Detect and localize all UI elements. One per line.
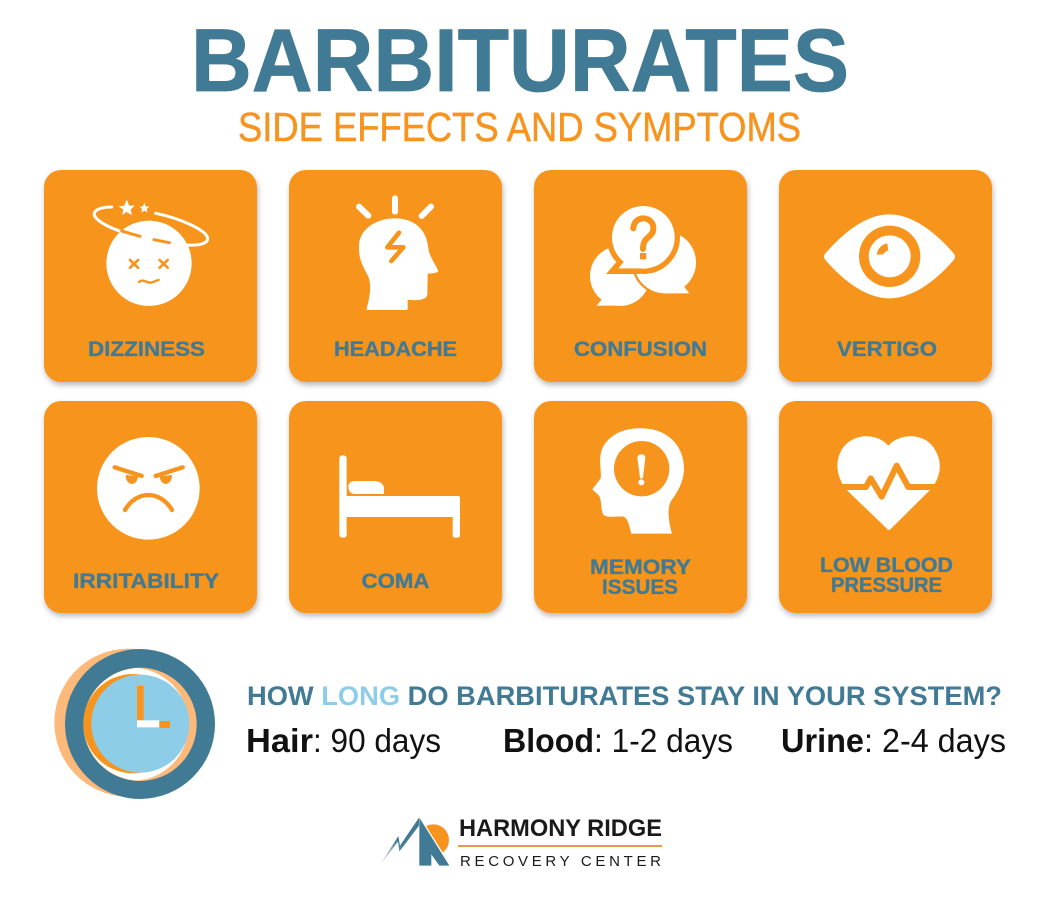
icon: eye: [824, 214, 955, 298]
panel: low blood pressure: [779, 401, 992, 613]
label: headache: HEADACHE: [334, 338, 457, 361]
logo rule: [458, 845, 662, 847]
stat: blood: [503, 722, 733, 759]
logo tagline: RECOVERY CENTER: [460, 853, 661, 870]
label: low blood pressure: [820, 554, 953, 597]
panel: memory issues: [534, 401, 747, 613]
label: low blood pressure: PRESSURE: [831, 574, 942, 597]
question heading: HOW LONG DO BARBITURATES STAY IN YOUR SYSTEM?: [247, 681, 1002, 711]
label: confusion: CONFUSION: [574, 338, 707, 361]
icon: dizzy face: [94, 200, 208, 306]
title: BARBITURATES: [191, 10, 849, 110]
icon: bed: [339, 455, 460, 538]
icon: heart with pulse line: [830, 436, 947, 530]
icon: angry face: [97, 437, 200, 540]
icon: speech bubbles with question mark: [590, 201, 696, 306]
stat: blood: : 1-2 days: [594, 722, 733, 759]
stat: hair: [246, 722, 441, 759]
panel: headache: [289, 170, 502, 382]
label: vertigo: VERTIGO: [837, 338, 937, 361]
icon: head with lightning bolt: [359, 198, 438, 310]
label: low blood pressure: LOW BLOOD: [820, 554, 953, 577]
label: memory issues: ISSUES: [602, 576, 678, 599]
icon: mountain and sun: [380, 818, 449, 866]
logo: [381, 818, 662, 866]
subtitle: SIDE EFFECTS AND SYMPTOMS: [238, 104, 801, 150]
logo name: HARMONY RIDGE: [459, 815, 662, 842]
icon: clock: [54, 649, 215, 799]
stat: urine: Urine: [781, 722, 864, 759]
label: memory issues: [590, 556, 691, 599]
panel: confusion: [534, 170, 747, 382]
stat: blood: Blood: [503, 722, 594, 759]
icon: head with exclamation mark: [592, 428, 684, 534]
panel: vertigo: [779, 170, 992, 382]
stat: urine: [781, 722, 1006, 759]
panel: dizziness: [44, 170, 257, 382]
stat: hair: Hair: [246, 722, 313, 759]
panel: coma: [289, 401, 502, 613]
panel: irritability: [44, 401, 257, 613]
stat: urine: : 2-4 days: [864, 722, 1006, 759]
label: irritability: IRRITABILITY: [73, 570, 219, 593]
label: coma: COMA: [362, 570, 430, 593]
label: dizziness: DIZZINESS: [88, 338, 205, 361]
stat: hair: : 90 days: [313, 722, 441, 759]
label: memory issues: MEMORY: [590, 556, 691, 579]
